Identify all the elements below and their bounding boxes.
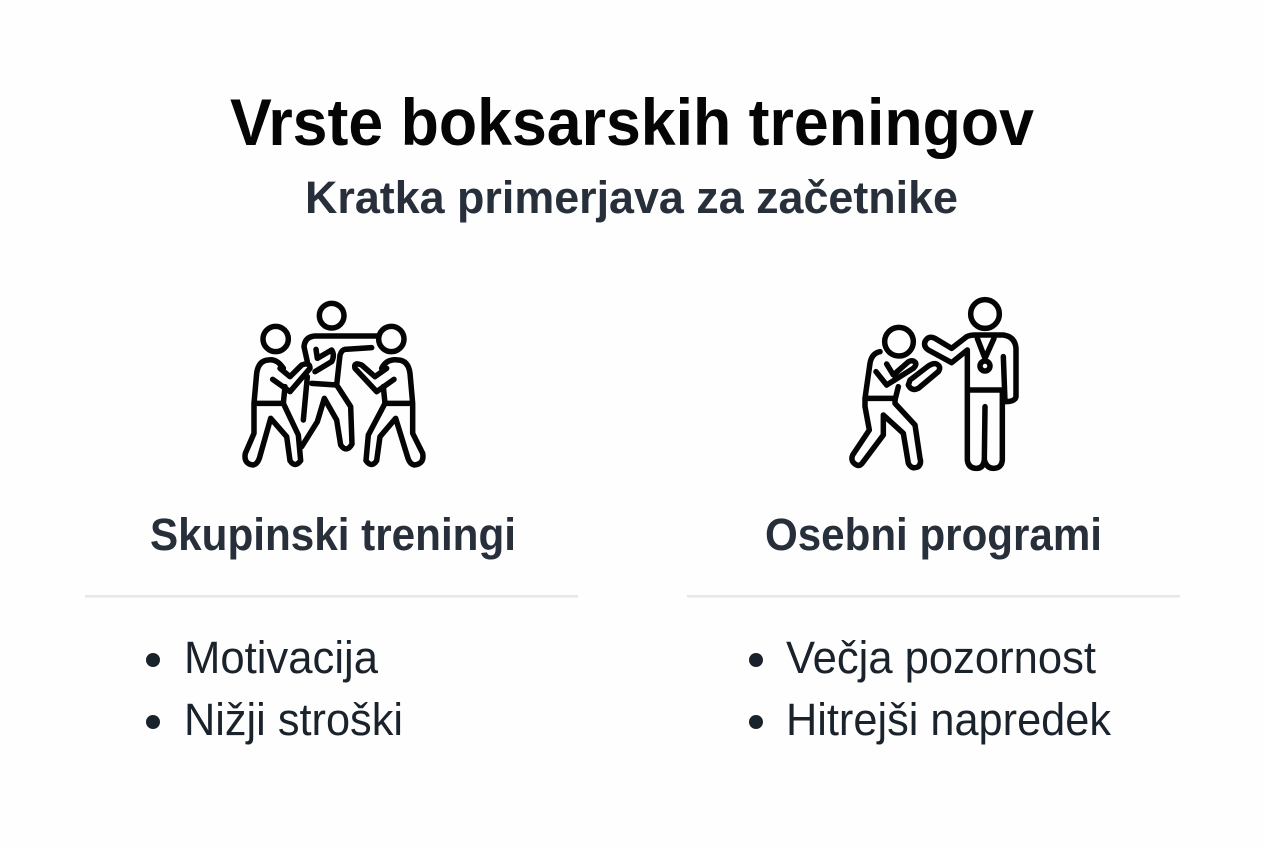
heading: personal programs: Osebni programi (765, 509, 1102, 560)
subtitle: Kratka primerjava za začetnike (305, 172, 958, 223)
panel: personal programs (687, 300, 1180, 745)
panel: group training (85, 303, 578, 745)
icon: three boxers (245, 303, 423, 465)
bullet list: group training: Motivacija (184, 632, 379, 683)
bullet list: personal programs: Večja pozornost (786, 632, 1096, 683)
bullet list: group training: Nižji stroški (184, 694, 403, 745)
heading: group training: Skupinski treningi (150, 509, 516, 560)
bullet list: personal programs (749, 632, 1111, 745)
bullet list: group training (146, 632, 403, 745)
icon: coach and boxer (852, 300, 1016, 468)
bullet list: personal programs: Hitrejši napredek (786, 694, 1111, 745)
title: Vrste boksarskih treningov (230, 85, 1034, 159)
